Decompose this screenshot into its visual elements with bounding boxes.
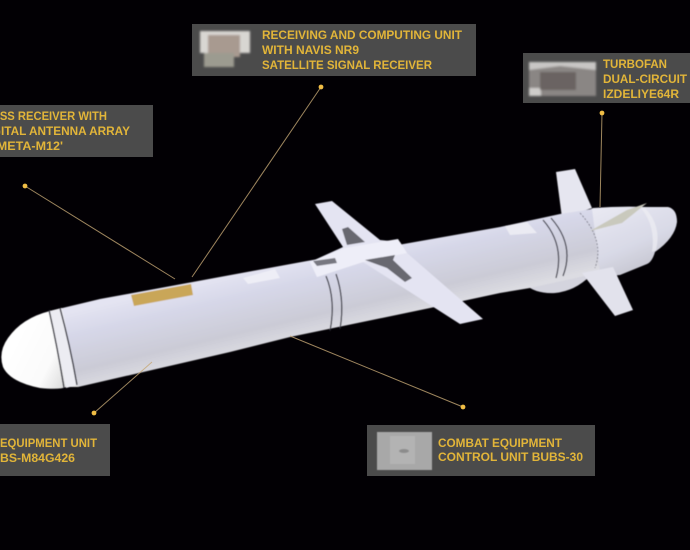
missile body	[50, 209, 600, 387]
gold panel	[131, 284, 193, 306]
panel: combat equipment control unit	[367, 425, 595, 476]
panel: turbofan	[523, 53, 690, 103]
label text: RECEIVING AND COMPUTING UNIT	[262, 28, 463, 42]
rear lower bulge	[525, 268, 590, 293]
highlight panel near tail	[505, 222, 537, 235]
small dark hatch	[313, 258, 337, 266]
tail collar highlight	[641, 208, 658, 252]
panel: GNSS receiver	[0, 105, 153, 157]
photo: turbofan engine	[529, 62, 596, 96]
nose rings	[49, 308, 77, 388]
label text	[603, 57, 688, 101]
label text: SATELLITE SIGNAL RECEIVER	[262, 58, 432, 72]
label text	[0, 436, 98, 465]
label text: TURBOFAN	[603, 57, 667, 71]
leader lines	[25, 87, 602, 413]
rear rings	[543, 218, 567, 278]
nose band	[50, 308, 78, 388]
panel: receiving and computing unit	[192, 24, 476, 76]
label text: IZDELIYE64R	[603, 87, 679, 101]
label text: BS-M84G426	[0, 451, 75, 465]
tail cone	[585, 207, 677, 278]
wing dark inset upper	[342, 227, 365, 245]
label text	[262, 28, 463, 72]
photo: computing unit	[200, 31, 250, 67]
missile	[1, 169, 677, 389]
marker dots	[23, 85, 604, 415]
label text: DUAL-CIRCUIT	[603, 72, 688, 86]
photo: control unit	[377, 432, 432, 470]
mid-body rings	[326, 274, 342, 331]
label text: WITH NAVIS NR9	[262, 43, 359, 57]
panel: equipment unit	[0, 424, 110, 476]
white hatch panel	[243, 269, 280, 284]
wing	[310, 201, 483, 324]
label text: COMBAT EQUIPMENT	[438, 436, 563, 450]
lower tail fin	[582, 267, 633, 316]
nose cone	[1, 308, 78, 389]
label text	[438, 436, 583, 464]
label text	[0, 109, 130, 153]
dashed rear ring	[580, 213, 598, 268]
side tail fin	[590, 203, 647, 231]
label text: CONTROL UNIT BUBS-30	[438, 450, 583, 464]
wing root plate	[310, 239, 407, 277]
top tail fin	[556, 169, 592, 218]
wing dark inset lower	[365, 255, 412, 282]
label text: EQUIPMENT UNIT	[0, 436, 98, 450]
